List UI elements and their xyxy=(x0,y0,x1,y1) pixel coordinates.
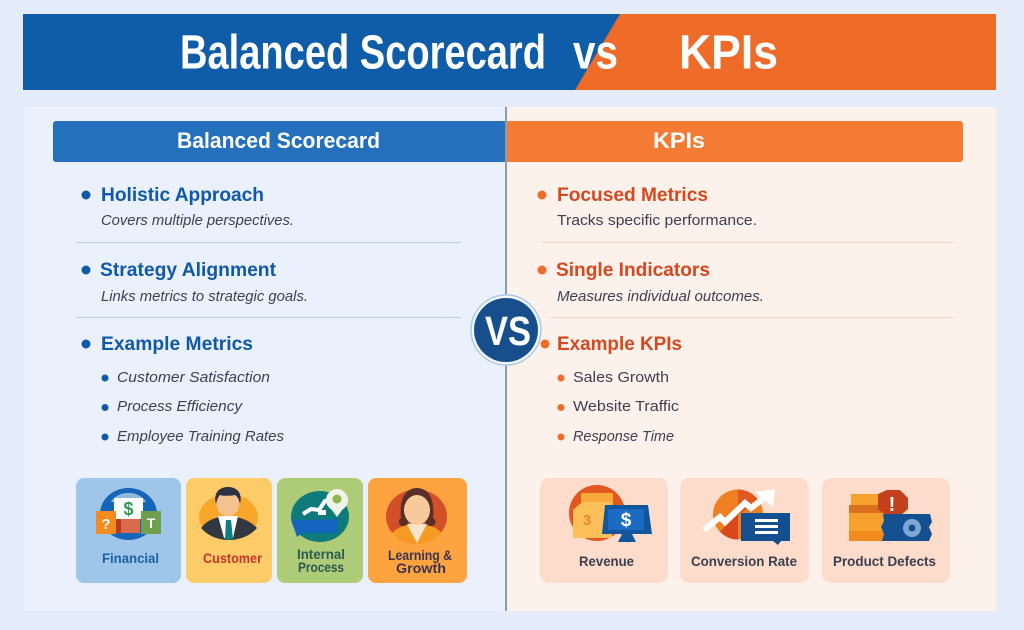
point: Holistic Approach: Covers multiple perspectives. xyxy=(101,212,294,229)
panel header: KPIs: KPIs xyxy=(653,128,705,153)
icon: revenue: $ xyxy=(621,510,632,531)
card: Conversion Rate: Conversion Rate xyxy=(691,553,797,569)
point: Example KPIs: Website Traffic xyxy=(573,398,680,415)
icon: financial xyxy=(96,488,161,540)
point: Strategy Alignment: Links metrics to strategic goals. xyxy=(101,288,308,305)
icon: defects: ! xyxy=(889,494,895,516)
title banner: vs xyxy=(573,26,618,80)
title banner: Balanced Scorecard xyxy=(180,26,546,80)
icon: financial: ? xyxy=(101,516,111,533)
card: Revenue xyxy=(540,478,668,583)
icon: revenue: 3 xyxy=(583,512,591,529)
card: Customer xyxy=(186,478,272,583)
VS badge xyxy=(471,295,541,365)
icon: financial: T xyxy=(147,515,156,531)
card: Learning & Growth xyxy=(368,478,467,583)
point: Focused Metrics xyxy=(538,185,757,229)
panel header: KPIs xyxy=(506,121,963,162)
title banner: KPIs xyxy=(679,26,778,80)
card: Internal Process: Internal xyxy=(297,546,345,562)
center divider xyxy=(505,107,507,611)
title banner xyxy=(23,14,996,90)
point: Example KPIs xyxy=(540,334,682,445)
card: Product Defects: Product Defects xyxy=(833,553,936,569)
point: Focused Metrics: Tracks specific performance. xyxy=(557,212,757,229)
card: Conversion Rate xyxy=(680,478,809,583)
point: Single Indicators xyxy=(538,260,764,305)
icon: revenue xyxy=(569,485,652,542)
point: Example KPIs: Example KPIs xyxy=(557,334,682,355)
icon: financial: $ xyxy=(123,499,134,519)
point: Single Indicators: Single Indicators xyxy=(556,260,710,281)
VS badge: VS xyxy=(485,308,531,354)
point: Example Metrics: Employee Training Rates xyxy=(117,428,284,445)
point: Example Metrics: Customer Satisfaction xyxy=(117,369,270,386)
point: Strategy Alignment xyxy=(82,260,308,305)
card: Revenue: Revenue xyxy=(579,553,634,569)
icon: learning xyxy=(386,488,447,544)
panel: KPIs xyxy=(506,107,996,611)
panel: Balanced Scorecard xyxy=(24,107,506,611)
point: Example KPIs: Sales Growth xyxy=(573,369,669,386)
point: Example Metrics: Process Efficiency xyxy=(117,398,244,415)
point: Focused Metrics: Focused Metrics xyxy=(557,185,708,206)
card: Financial: Financial xyxy=(102,550,159,566)
card: Internal Process: Process xyxy=(298,559,344,575)
point: Strategy Alignment: Strategy Alignment xyxy=(100,260,277,281)
point: Example KPIs: Response Time xyxy=(573,428,674,445)
point: Example Metrics xyxy=(82,334,284,445)
card: Internal Process xyxy=(277,478,363,583)
card: Learning & Growth: Learning & xyxy=(388,547,452,563)
icon: customer xyxy=(199,487,258,540)
panel header: Balanced Scorecard xyxy=(53,121,506,162)
card: Learning & Growth: Growth xyxy=(396,560,446,576)
point: Example Metrics: Example Metrics xyxy=(101,334,253,355)
icon: conversion xyxy=(704,489,790,545)
point: Holistic Approach xyxy=(82,185,294,229)
point: Holistic Approach: Holistic Approach xyxy=(101,185,264,206)
panel header: Balanced Scorecard: Balanced Scorecard xyxy=(177,128,380,153)
icon: internal process xyxy=(291,489,349,542)
card: Financial xyxy=(76,478,181,583)
point: Single Indicators: Measures individual outcomes. xyxy=(557,288,764,305)
card: Product Defects xyxy=(822,478,950,583)
card: Customer: Customer xyxy=(203,550,262,566)
